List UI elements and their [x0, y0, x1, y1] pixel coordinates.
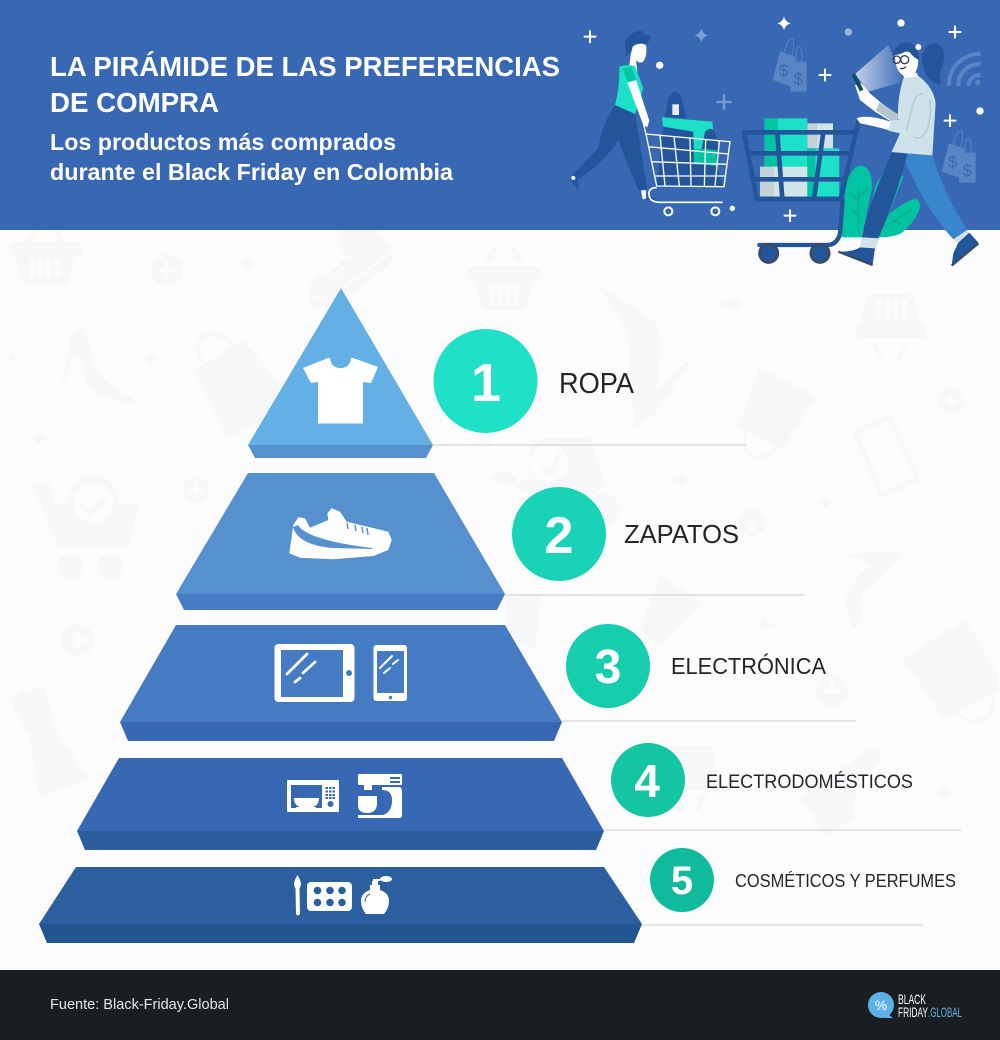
plant	[842, 160, 920, 237]
panel: pyramid tier 5 cosmeticos	[39, 867, 642, 943]
icon: perfume bottle	[361, 876, 392, 914]
icon: eyeshadow palette	[307, 882, 352, 911]
panel: pyramid tier 4 electrodomesticos	[77, 758, 604, 850]
panel: pyramid tier 1 ropa	[248, 288, 433, 458]
shopping cart full of boxes	[744, 118, 862, 262]
subtitle	[50, 129, 454, 185]
badge 2: 2	[545, 507, 573, 565]
icon: t-shirt	[303, 358, 378, 424]
panel: pyramid tier 2 zapatos	[176, 473, 505, 610]
badge 3: 3	[595, 641, 621, 694]
icon: wifi	[949, 54, 981, 86]
icon: brush	[294, 875, 301, 916]
illustration: shoppers with carts	[570, 17, 984, 266]
logo: .GLOBAL	[928, 1004, 962, 1020]
title	[50, 51, 560, 118]
panel: pyramid tier 3 electronica	[120, 625, 562, 741]
label: electronica: ELECTRÓNICA	[671, 653, 827, 679]
icon: smartphone	[374, 645, 407, 701]
icon: tablet	[274, 644, 354, 702]
divider lines	[433, 445, 961, 925]
label: zapatos: ZAPATOS	[624, 519, 739, 549]
logo: FRIDAY	[898, 1004, 928, 1020]
subtitle: Los productos más comprados	[50, 129, 396, 155]
icon: price tags	[773, 39, 976, 183]
woman with phone	[838, 42, 978, 266]
icon: sparkles and plus signs	[584, 17, 984, 222]
label: electrodomesticos: ELECTRODOMÉSTICOS	[706, 770, 913, 793]
icon: microwave	[287, 780, 339, 812]
source text: Fuente: Black-Friday.Global	[50, 996, 229, 1013]
logo: %	[875, 997, 887, 1013]
icon: price tags: $	[794, 70, 803, 89]
badge 5	[650, 848, 714, 912]
badge 4	[611, 743, 685, 817]
badge 1	[434, 329, 538, 433]
badge 2	[512, 487, 606, 581]
label: ropa: ROPA	[559, 368, 635, 400]
icon: price tags: $	[948, 153, 957, 172]
logo: BLACK	[898, 991, 926, 1007]
title: DE COMPRA	[50, 87, 219, 118]
badge 4: 4	[634, 755, 660, 807]
badge 3	[566, 624, 650, 708]
man pushing white cart	[570, 31, 730, 215]
footer band	[0, 970, 1000, 1040]
logo	[868, 991, 962, 1020]
subtitle: durante el Black Friday en Colombia	[50, 159, 454, 185]
label: cosmeticos y perfumes: COSMÉTICOS Y PERFUMES	[735, 871, 956, 891]
badge 1: 1	[471, 353, 501, 413]
icon: price tags: $	[962, 161, 972, 180]
icon: stand mixer	[358, 774, 402, 818]
title: LA PIRÁMIDE DE LAS PREFERENCIAS	[50, 51, 560, 82]
icon: price tags: $	[779, 61, 788, 80]
header band	[0, 0, 1000, 230]
icon: sneaker	[289, 508, 392, 559]
badge 5: 5	[671, 859, 693, 903]
